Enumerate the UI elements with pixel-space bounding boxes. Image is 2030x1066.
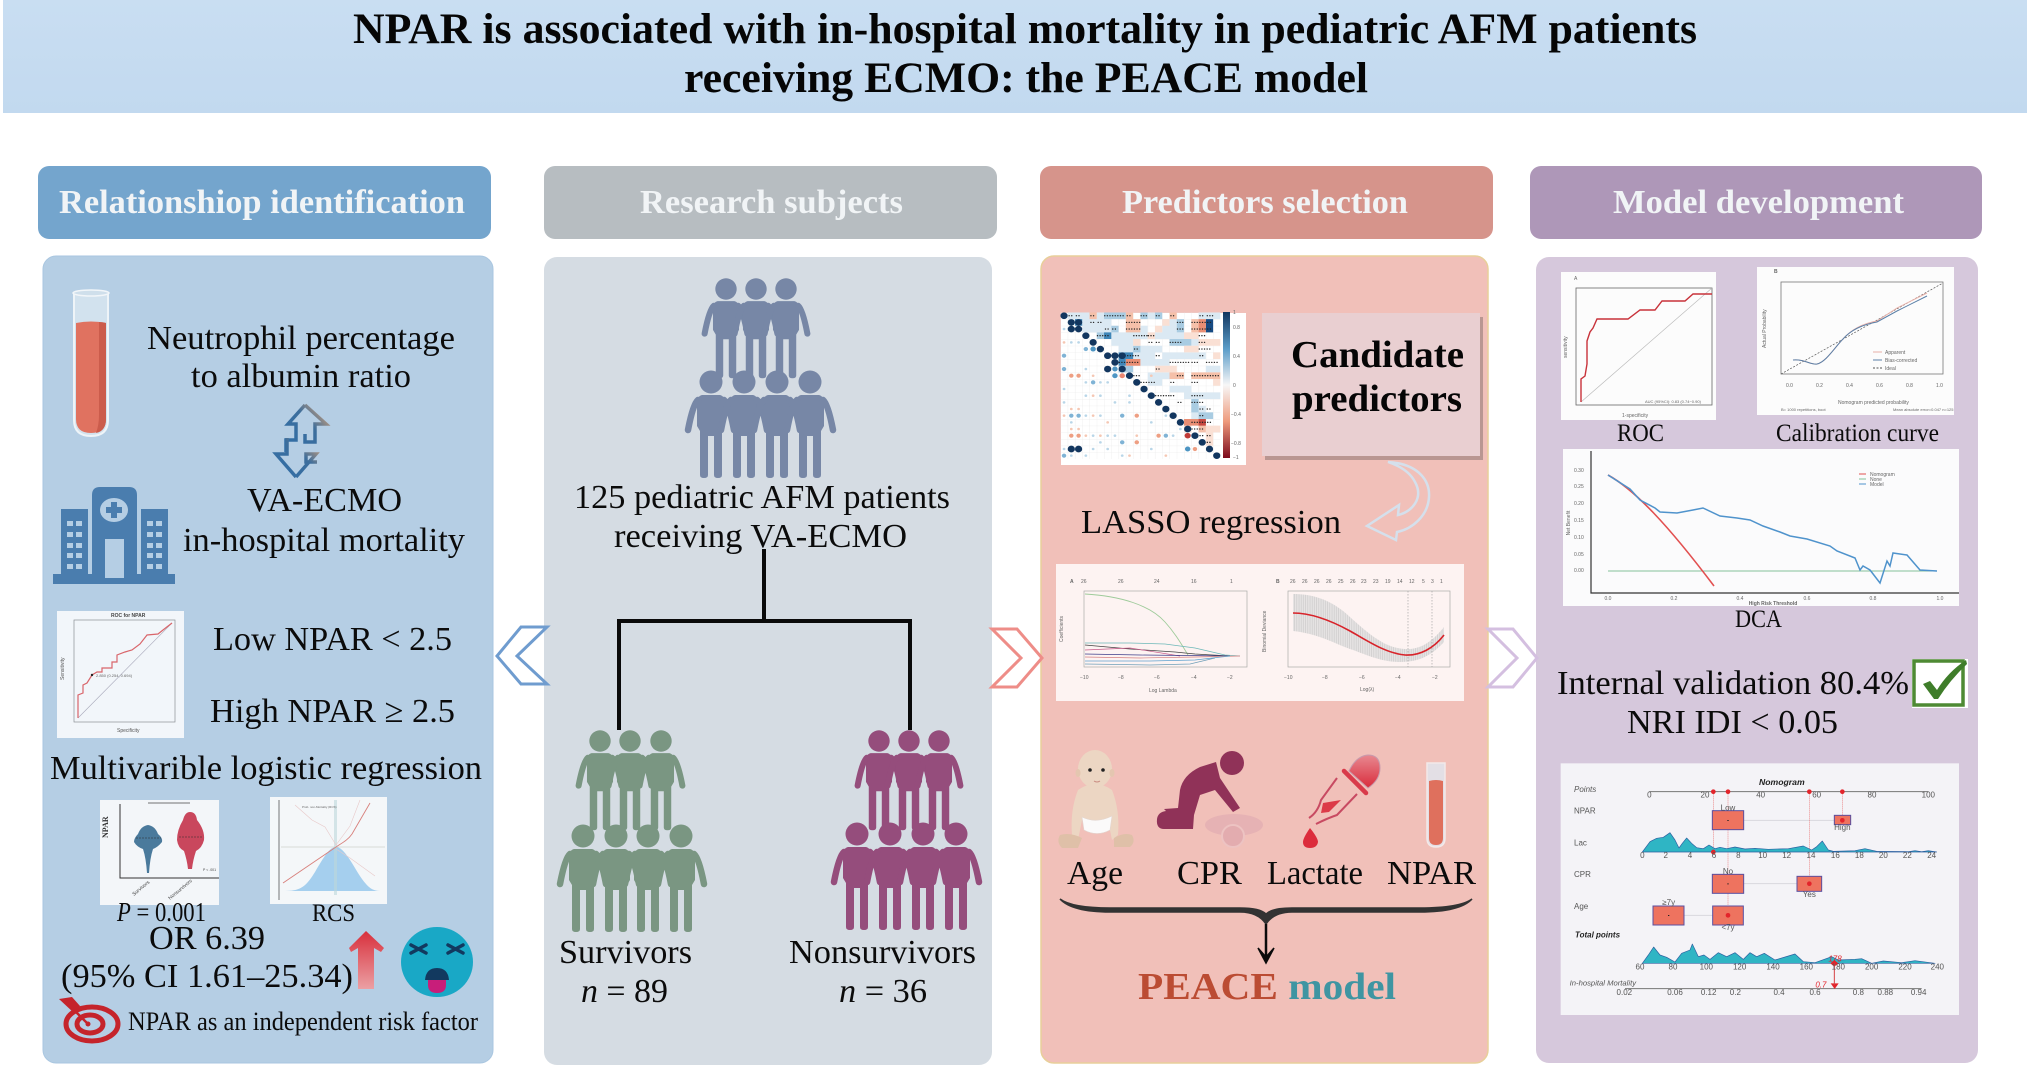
title banner: receiving ECMO: the PEACE model: [684, 55, 1368, 102]
chart: nomogram: 60: [1812, 791, 1822, 800]
chart: calibration curve: 0.8: [1906, 383, 1913, 389]
chart: correlation matrix: [1060, 310, 1246, 465]
title banner: [3, 0, 2027, 113]
text: neutrophil percentage to albumin ratio: [147, 320, 455, 395]
icon: all patients group: [688, 278, 833, 478]
text: internal validation: [1557, 665, 1909, 741]
arrow: curved to LASSO: [1367, 462, 1429, 540]
text: nonsurvivors count: [789, 934, 976, 1010]
chart: LASSO binomial deviance: 23: [1373, 579, 1379, 585]
chart: LASSO binomial deviance: 19: [1385, 579, 1391, 585]
text: odds ratio: (95% CI 1.61–25.34): [61, 958, 353, 995]
icon: baby: [1058, 750, 1134, 848]
chart: calibration curve: [1757, 267, 1954, 415]
text: internal validation: NRI IDI < 0.05: [1627, 704, 1838, 741]
text: RCS label: RCS: [312, 900, 355, 927]
chart: LASSO binomial deviance: 23: [1361, 579, 1367, 585]
chart: nomogram: 160: [1800, 962, 1814, 971]
chart: ROC for NPAR: [57, 611, 184, 738]
text: calibration label: Calibration curve: [1776, 420, 1939, 447]
text: multivariable logistic regression: Multivarible logistic regression: [50, 750, 482, 787]
chart: nomogram: 80: [1669, 962, 1678, 971]
heading: Research subjects: [544, 166, 997, 239]
chart: nomogram: 20: [1701, 791, 1710, 800]
text: odds ratio: [61, 920, 353, 995]
chart: LASSO coefficients: 26: [1081, 579, 1087, 585]
chart: nomogram: High: [1834, 823, 1851, 832]
chart: restricted cubic spline: [270, 797, 387, 904]
text: predictor names: Lactate: [1267, 855, 1363, 892]
panel: research subjects: [544, 257, 992, 1065]
chart: nomogram: 18: [1855, 851, 1864, 860]
chart: nomogram: Yes: [1803, 890, 1816, 899]
chart: calibration curve: Bias-corrected: [1885, 358, 1917, 364]
chart: NPAR violin plot: Survivors: [131, 879, 152, 898]
chart: nomogram: 0.06: [1667, 988, 1683, 997]
chart: ROC for NPAR: Sensitivity: [60, 657, 66, 680]
chart: LASSO binomial deviance: 26: [1314, 579, 1320, 585]
heading: Predictors selection: Predictors selection: [1122, 184, 1408, 221]
chart: LASSO binomial deviance: −8: [1322, 675, 1328, 681]
chart: LASSO binomial deviance: B: [1276, 579, 1280, 585]
chart: ROC: A: [1574, 276, 1578, 282]
text: NPAR cut-offs: Low NPAR < 2.5: [213, 621, 452, 658]
chart: calibration curve: Ideal: [1885, 366, 1896, 372]
chart: LASSO binomial deviance: 26: [1290, 579, 1296, 585]
text: PEACE model: PEACE model: [1138, 966, 1396, 1008]
chart: nomogram: 0.94: [1911, 988, 1927, 997]
chart: decision curve analysis: [1563, 449, 1959, 607]
chart: nomogram: 140: [1766, 962, 1780, 971]
tree connector: [619, 549, 910, 730]
chart: nomogram: 40: [1756, 791, 1766, 800]
text: NPAR cut-offs: [210, 621, 455, 730]
text: predictor names: CPR: [1177, 855, 1242, 892]
heading: Relationship identification: [38, 166, 491, 239]
chart: NPAR violin plot: [100, 800, 219, 905]
chart: LASSO coefficients: −10: [1080, 675, 1089, 681]
panel: relationship identification: [43, 256, 493, 1063]
text: survivors count: n = 89: [581, 973, 668, 1010]
chart: nomogram: 4: [1688, 851, 1693, 860]
chart: nomogram: 0: [1640, 851, 1645, 860]
chart: nomogram: 220: [1898, 962, 1912, 971]
chart: correlation matrix: 0.8: [1233, 325, 1240, 331]
chart: correlation matrix: 1: [1233, 310, 1236, 316]
text: VA-ECMO in-hospital mortality: in-hospital mortality: [183, 522, 465, 559]
callout: candidate predictors: [1262, 313, 1483, 460]
text: P value: P = 0.001: [116, 897, 206, 927]
chart: LASSO coefficients: 1: [1230, 579, 1233, 585]
chart: nomogram: ≥7y: [1662, 898, 1675, 907]
text: cohort description: receiving VA-ECMO: [614, 518, 907, 555]
chart: nomogram: Lac: [1574, 838, 1587, 847]
text: odds ratio: OR 6.39: [149, 920, 265, 957]
chart: nomogram: Age: [1574, 902, 1589, 911]
chart: decision curve analysis: 0.10: [1574, 535, 1584, 541]
chart: LASSO coefficients: Coefficients: [1059, 615, 1065, 642]
chart: nomogram: 12: [1782, 851, 1792, 860]
chart: correlation matrix: −0.4: [1231, 412, 1241, 418]
heading: Model development: [1530, 166, 1982, 239]
callout: candidate predictors: predictors: [1292, 378, 1462, 420]
chart: nomogram: Low: [1721, 803, 1736, 812]
text: nonsurvivors count: n = 36: [839, 973, 927, 1010]
chart: nomogram: 2: [1663, 851, 1668, 860]
chart: nomogram: <7y: [1721, 923, 1735, 932]
heading: Model development: Model development: [1613, 184, 1905, 221]
chart: LASSO binomial deviance: −4: [1395, 675, 1401, 681]
icon: green check box: [1912, 659, 1968, 708]
icon: dizzy face: [401, 927, 473, 997]
arrow: to PEACE model: [1258, 924, 1274, 963]
chart: nomogram: 60: [1636, 962, 1645, 971]
heading: Research subjects: Research subjects: [640, 184, 903, 221]
icon: CPR: [1157, 751, 1263, 847]
chart: nomogram: 24: [1927, 851, 1937, 860]
chart: nomogram: CPR: [1574, 870, 1591, 879]
chart: decision curve analysis: 0.15: [1574, 518, 1584, 524]
chart: correlation matrix: −0.8: [1231, 441, 1241, 447]
chart: NPAR violin plot: NPAR: [101, 816, 110, 838]
chart: LASSO binomial deviance: 3: [1431, 579, 1434, 585]
heading: Relationship identification: Relationshiop identification: [59, 184, 465, 221]
title banner: NPAR is associated with in-hospital mortality in pediatric AFM patients: [353, 6, 1697, 53]
chart: decision curve analysis: 0.8: [1870, 596, 1877, 602]
chart: decision curve analysis: 0.20: [1574, 501, 1584, 507]
chart: correlation matrix: −1: [1233, 455, 1239, 461]
chart: LASSO binomial deviance: Binomial Deviance: [1262, 610, 1268, 652]
chart: nomogram: 8: [1736, 851, 1741, 860]
chart: ROC: AUC (95%CI): 0.83 (0.74−0.90): [1645, 399, 1702, 404]
chart: LASSO binomial deviance: 26: [1302, 579, 1308, 585]
chart: nomogram: 6: [1712, 851, 1717, 860]
callout: candidate predictors: Candidate: [1291, 334, 1464, 376]
chart: nomogram: 100: [1922, 791, 1936, 800]
chart: LASSO binomial deviance: 25: [1338, 579, 1344, 585]
chart: decision curve analysis: 1.0: [1937, 596, 1944, 602]
chart: nomogram: [1560, 763, 1959, 1015]
arrow: blue chevron to relationship panel: [497, 627, 547, 684]
chart: LASSO binomial deviance: −2: [1432, 675, 1438, 681]
icon: survivors group: [560, 730, 704, 932]
chart: LASSO binomial deviance: 26: [1326, 579, 1332, 585]
chart: nomogram: 0.7: [1815, 980, 1827, 989]
chart: ROC for NPAR: Specificity: [117, 728, 140, 734]
chart: nomogram: 178: [1828, 955, 1842, 964]
chart: decision curve analysis: 0.2: [1671, 596, 1678, 602]
chart: ROC: [1561, 272, 1716, 420]
chart: nomogram: 0.88: [1878, 988, 1894, 997]
text: predictor names: Age: [1067, 855, 1123, 892]
chart: NPAR violin plot: Nonsurvivors: [167, 878, 194, 902]
chart: nomogram: 16: [1831, 851, 1840, 860]
icon: nonsurvivors group: [834, 730, 979, 930]
icon: two-way arrows: [276, 405, 326, 477]
chart: calibration curve: B: [1774, 269, 1778, 275]
chart: decision curve analysis: Model: [1870, 482, 1884, 488]
text: predictor names: NPAR: [1387, 855, 1476, 892]
chart: calibration curve: Mean absolute error=0.047 n=125: [1893, 407, 1954, 412]
chart: LASSO binomial deviance: −10: [1284, 675, 1293, 681]
chart: nomogram: Total points: [1575, 930, 1621, 939]
chart: nomogram: 80: [1868, 791, 1877, 800]
icon: hospital: [53, 487, 175, 584]
icon: NPAR test tube: [1427, 763, 1445, 847]
panel: model development: [1536, 257, 1978, 1063]
text: VA-ECMO in-hospital mortality: VA-ECMO: [247, 482, 402, 519]
chart: LASSO binomial deviance: [1262, 579, 1450, 693]
chart: nomogram: 180: [1832, 962, 1846, 971]
icon: lactate dropper: [1303, 755, 1380, 848]
chart: LASSO coefficients: −6: [1154, 675, 1160, 681]
chart: nomogram: 0.2: [1730, 988, 1741, 997]
chart: nomogram: 22: [1903, 851, 1912, 860]
chart: LASSO coefficients: −4: [1191, 675, 1197, 681]
text: survivors count: Survivors: [559, 934, 692, 971]
chart: correlation matrix: 0: [1233, 383, 1236, 389]
chart: correlation matrix: 0.4: [1233, 354, 1240, 360]
text: neutrophil percentage to albumin ratio: Neutrophil percentage: [147, 320, 455, 357]
chart: LASSO binomial deviance: −6: [1359, 675, 1365, 681]
chart: nomogram: 200: [1865, 962, 1879, 971]
chart: LASSO binomial deviance: 26: [1350, 579, 1356, 585]
text: DCA label: DCA: [1735, 606, 1782, 633]
text: LASSO regression: LASSO regression: [1081, 504, 1341, 541]
chart: nomogram: NPAR: [1574, 807, 1596, 816]
chart: nomogram: 0.12: [1701, 988, 1717, 997]
text: cohort description: [574, 479, 950, 555]
chart: ROC for NPAR: ROC for NPAR: [111, 613, 146, 619]
chart: decision curve analysis: 0.0: [1605, 596, 1612, 602]
chart: nomogram: 0.02: [1617, 988, 1633, 997]
chart: nomogram: 20: [1879, 851, 1888, 860]
heading: Predictors selection: [1040, 166, 1493, 239]
chart: calibration curve: Actual Probability: [1762, 309, 1768, 348]
chart: nomogram: 14: [1807, 851, 1816, 860]
chart: nomogram: Points: [1574, 785, 1596, 794]
chart: nomogram: 0.6: [1809, 988, 1821, 997]
text: NPAR cut-offs: High NPAR ≥ 2.5: [210, 693, 455, 730]
chart: LASSO binomial deviance: 12: [1409, 579, 1415, 585]
chart: restricted cubic spline: Prob. non-Mortality (RCS): [302, 805, 337, 809]
chart: calibration curve: Apparent: [1885, 350, 1906, 356]
chart: calibration curve: Nomogram predicted probability: [1838, 400, 1909, 406]
arrow: red chevron to predictors panel: [992, 629, 1042, 687]
chart: nomogram: 240: [1931, 962, 1945, 971]
text: internal validation: Internal validation 80.4%: [1557, 665, 1909, 702]
chart: nomogram: No: [1723, 867, 1734, 876]
chart: decision curve analysis: Net Benefit: [1566, 510, 1572, 535]
chart: nomogram: Nomogram: [1759, 777, 1805, 787]
chart: LASSO binomial deviance: 5: [1422, 579, 1425, 585]
chart: LASSO binomial deviance: 14: [1397, 579, 1403, 585]
chart: nomogram: 120: [1733, 962, 1747, 971]
chart: ROC for NPAR: 2.850 (0.254, 0.694): [96, 673, 133, 678]
chart: calibration curve: 1.0: [1936, 383, 1943, 389]
icon: test tube: [73, 290, 109, 436]
chart: calibration curve: 0.6: [1876, 383, 1883, 389]
chart: decision curve analysis: 0.25: [1574, 484, 1584, 490]
chart: ROC: sensitivity: [1563, 336, 1569, 358]
icon: target with arrow: [59, 997, 118, 1041]
brace: [1060, 899, 1472, 924]
text: independent risk factor: NPAR as an independent risk factor: [128, 1007, 478, 1036]
chart: decision curve analysis: 0.6: [1804, 596, 1811, 602]
chart: decision curve analysis: 0.4: [1737, 596, 1744, 602]
text: survivors count: [559, 934, 692, 1010]
chart: nomogram: 0.8: [1853, 988, 1864, 997]
text: predictor names: [1067, 855, 1476, 892]
chart: LASSO coefficients: 24: [1154, 579, 1160, 585]
chart: nomogram: 10: [1758, 851, 1768, 860]
chart: LASSO coefficients: Log Lambda: [1149, 688, 1177, 694]
chart: LASSO coefficients: 26: [1118, 579, 1124, 585]
chart: NPAR violin plot: P < .001: [203, 868, 216, 872]
arrow: purple chevron to model panel: [1488, 629, 1537, 687]
chart: LASSO coefficients: 16: [1191, 579, 1197, 585]
text: VA-ECMO in-hospital mortality: [183, 482, 465, 559]
panel: predictors selection: [1041, 256, 1488, 1063]
chart: decision curve analysis: Nomogram: [1870, 472, 1895, 478]
chart: LASSO coefficients: −8: [1118, 675, 1124, 681]
text: cohort description: 125 pediatric AFM patients: [574, 479, 950, 516]
text: nonsurvivors count: Nonsurvivors: [789, 934, 976, 971]
chart: decision curve analysis: 0.00: [1574, 568, 1584, 574]
chart: LASSO coefficients: −2: [1227, 675, 1233, 681]
chart: LASSO binomial deviance: Log(λ): [1360, 687, 1375, 693]
chart: decision curve analysis: 0.30: [1574, 468, 1584, 474]
chart: nomogram: 0.4: [1773, 988, 1785, 997]
chart: nomogram: 100: [1700, 962, 1714, 971]
chart: LASSO coefficients: A: [1070, 579, 1074, 585]
chart: decision curve analysis: High Risk Threshold: [1749, 601, 1797, 607]
chart: LASSO plots: [1056, 564, 1464, 701]
chart: calibration curve: B= 1000 repetitions, boot: [1781, 407, 1826, 412]
chart: nomogram: In-hospital Mortality: [1570, 979, 1637, 988]
chart: LASSO coefficients: [1059, 579, 1247, 694]
text: ROC label: ROC: [1617, 420, 1664, 447]
text: neutrophil percentage to albumin ratio: to albumin ratio: [191, 358, 411, 395]
chart: decision curve analysis: None: [1870, 477, 1882, 483]
chart: ROC: 1-specificity: [1622, 413, 1649, 419]
chart: calibration curve: 0.2: [1816, 383, 1823, 389]
chart: LASSO binomial deviance: 1: [1440, 579, 1443, 585]
chart: decision curve analysis: 0.05: [1574, 552, 1584, 558]
icon: upward red arrow: [349, 931, 384, 989]
chart: calibration curve: 0.4: [1846, 383, 1853, 389]
chart: calibration curve: 0.0: [1786, 383, 1793, 389]
chart: nomogram: 0: [1647, 791, 1652, 800]
